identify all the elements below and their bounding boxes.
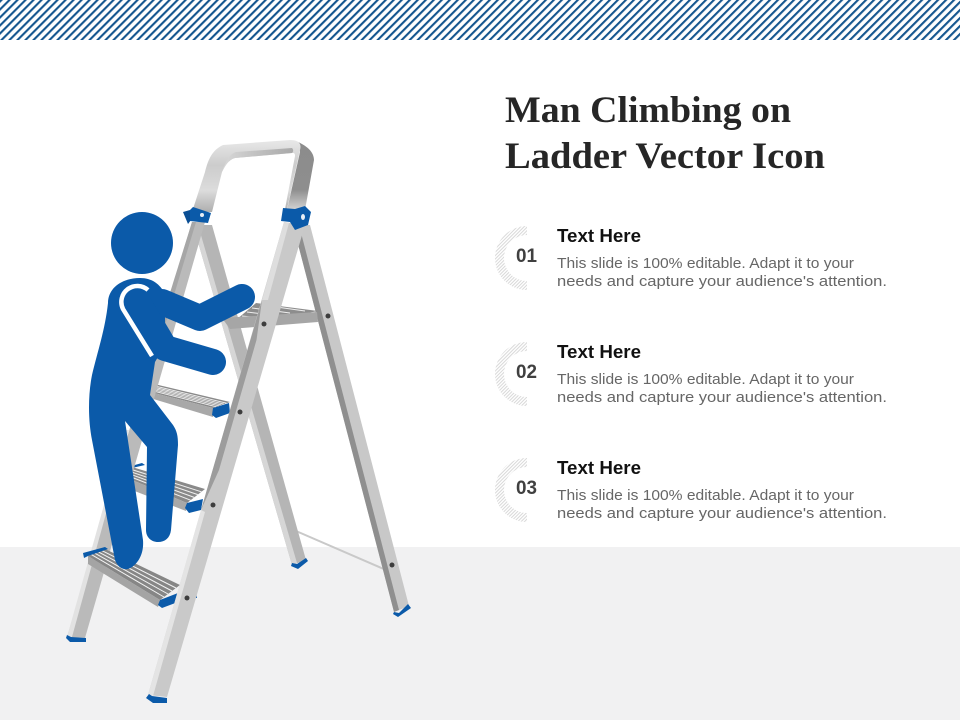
item 03 bbox=[495, 458, 887, 522]
far arm bbox=[162, 297, 242, 318]
man figure bbox=[89, 212, 242, 569]
illustration: man climbing ladder bbox=[66, 140, 411, 703]
badge 01: 01 bbox=[516, 246, 537, 267]
badge 03: 03 bbox=[516, 478, 537, 499]
text 01: This slide is 100% editable. Adapt it to your bbox=[557, 255, 854, 272]
tie rod bbox=[296, 531, 386, 570]
ladder clamps bbox=[183, 206, 311, 230]
text 01 bbox=[557, 226, 887, 290]
text 02: needs and capture your audience's attention. bbox=[557, 389, 887, 406]
title: Man Climbing on bbox=[505, 90, 791, 131]
text 02 bbox=[557, 342, 887, 406]
text 03: Text Here bbox=[557, 458, 641, 478]
item 01 bbox=[495, 226, 887, 290]
near arm bbox=[137, 301, 213, 362]
badge 02: 02 bbox=[516, 362, 537, 383]
badge 01 bbox=[495, 226, 537, 290]
lower middle step bbox=[131, 463, 205, 513]
top step bbox=[222, 303, 318, 329]
striped top banner bbox=[0, 0, 960, 40]
badge 02 bbox=[495, 342, 537, 406]
torso and legs bbox=[89, 278, 178, 569]
ladder feet bbox=[66, 558, 411, 703]
front right rail bbox=[148, 222, 305, 697]
badge 03 bbox=[495, 458, 537, 522]
head bbox=[111, 212, 173, 274]
text 01: Text Here bbox=[557, 226, 641, 246]
left front rail bbox=[67, 222, 205, 638]
text 03: needs and capture your audience's attention. bbox=[557, 505, 887, 522]
text 02: This slide is 100% editable. Adapt it to your bbox=[557, 371, 854, 388]
text 03 bbox=[557, 458, 887, 522]
text 02: Text Here bbox=[557, 342, 641, 362]
text 03: This slide is 100% editable. Adapt it to your bbox=[557, 487, 854, 504]
title: Ladder Vector Icon bbox=[505, 136, 825, 177]
title bbox=[505, 90, 825, 177]
text 01: needs and capture your audience's attention. bbox=[557, 273, 887, 290]
rivets bbox=[184, 314, 394, 600]
floor band bbox=[0, 547, 960, 720]
near arm white outline bbox=[121, 286, 152, 356]
rear inner leg bbox=[193, 225, 306, 565]
item 02 bbox=[495, 342, 887, 406]
upper middle step bbox=[150, 383, 230, 418]
ladder bbox=[66, 140, 411, 703]
rear right rail bbox=[293, 225, 409, 612]
top arch bbox=[192, 140, 314, 212]
bottom step bbox=[83, 547, 197, 608]
